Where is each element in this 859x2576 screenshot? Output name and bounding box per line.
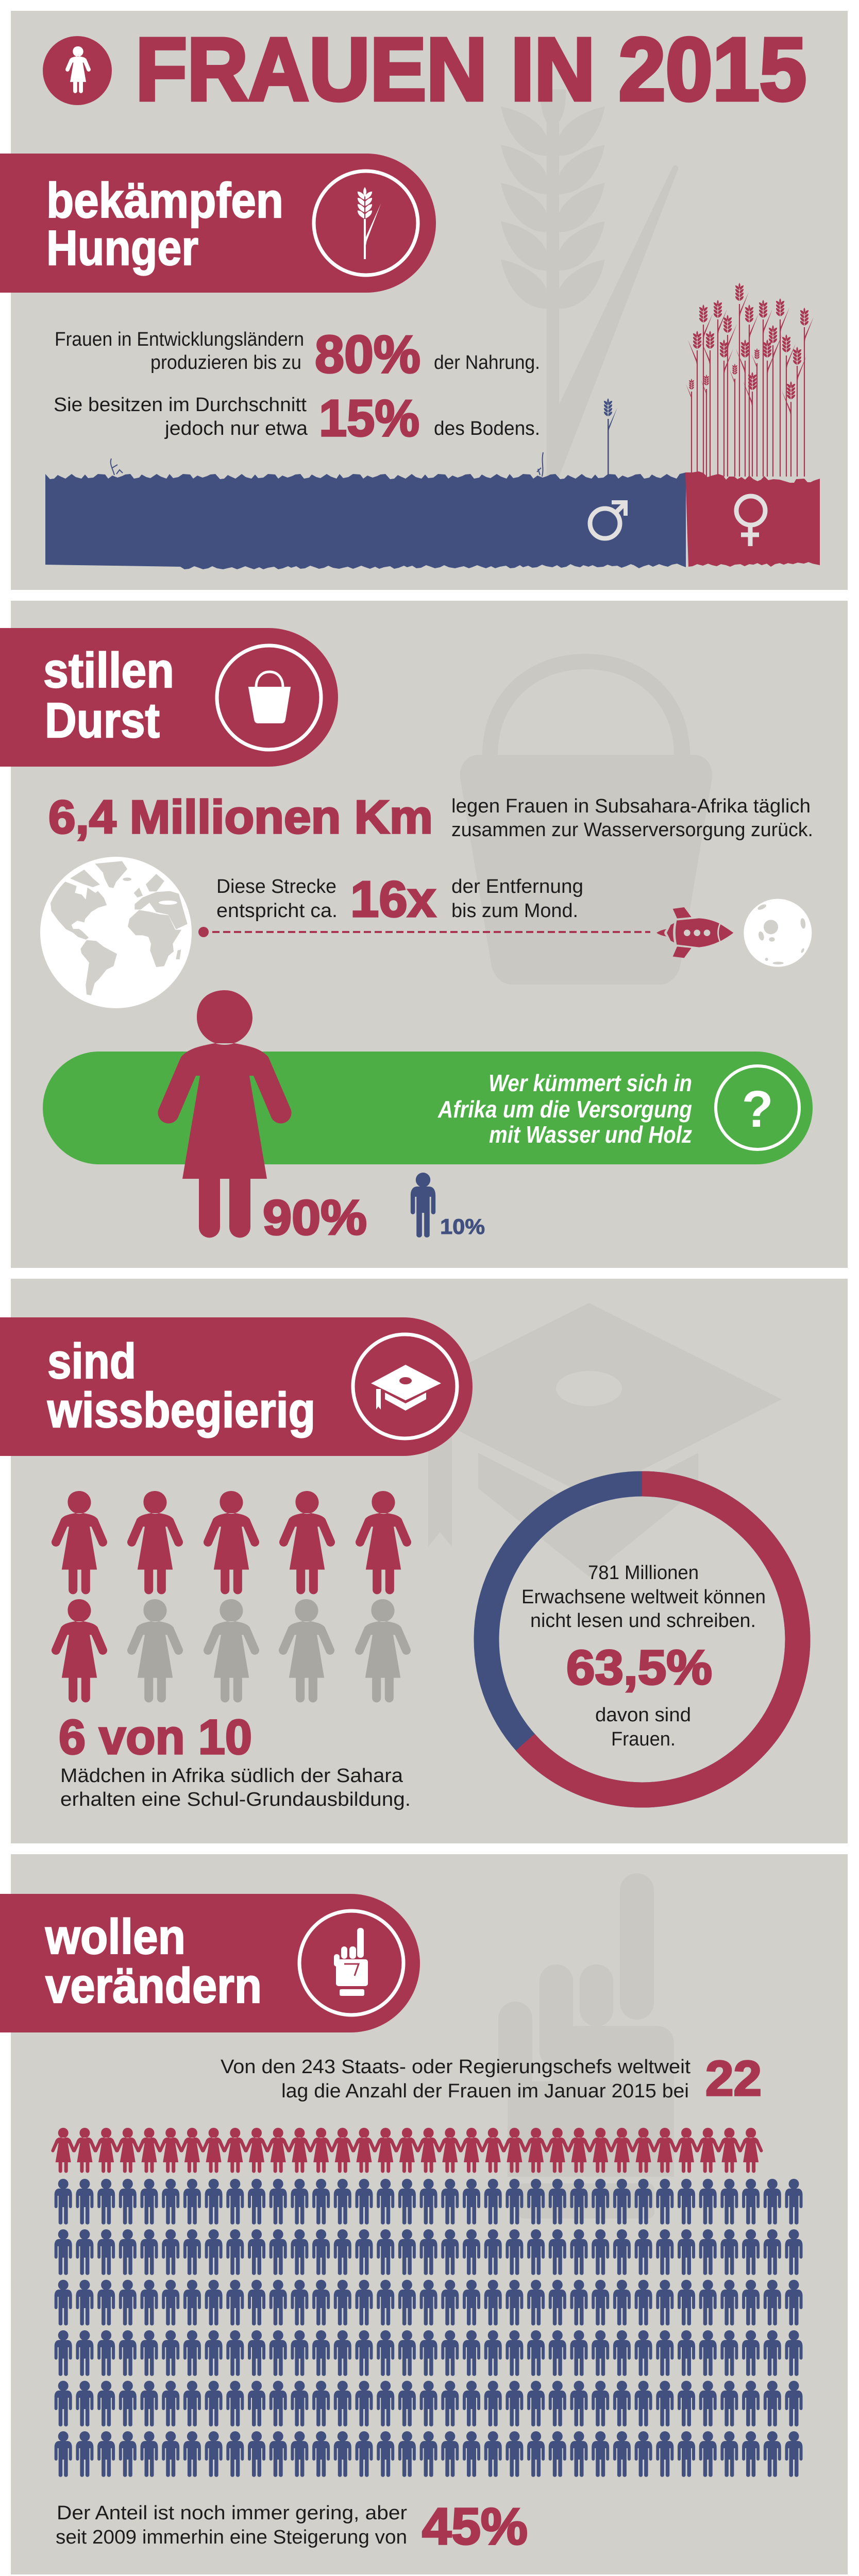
- female soil share: [685, 471, 820, 567]
- heading banner: sind wissbegierig: [0, 1317, 473, 1456]
- red wheat field: [686, 283, 814, 477]
- background wheat watermark: [501, 89, 678, 500]
- text block: Wasserversorgung: legen Frauen in Subsahara-Afrika täglich: [451, 795, 811, 817]
- panel: sind wissbegierig: [0, 1279, 848, 1843]
- icon: wheat: [314, 171, 418, 275]
- callout: Wer kümmert sich: Wer kümmert sich in: [489, 1070, 692, 1096]
- title icon: woman in circle: [43, 36, 112, 105]
- callout: Wer kümmert sich: [43, 1052, 813, 1164]
- text block: 80 percent: 80%: [315, 325, 420, 384]
- figure: woman 90%: [158, 990, 292, 1238]
- donut chart: 63.5 percent: [486, 1484, 798, 1795]
- text block: Wasserversorgung: [451, 795, 813, 841]
- male soil share: [45, 472, 686, 569]
- text block: Wasserversorgung: zusammen zur Wasserversorgung zurück.: [451, 819, 813, 841]
- heading banner: wollen verändern: verändern: [45, 1958, 262, 2013]
- text block: Staatschefs: Von den 243 Staats- oder Regierungschefs weltweit: [221, 2056, 690, 2078]
- text block: Anteil: [56, 2502, 407, 2548]
- background bucket watermark: [460, 654, 712, 985]
- icon: male sign: [590, 500, 628, 538]
- pictogram: men rows: [55, 2179, 803, 2477]
- text block: Mädchen: Mädchen in Afrika südlich der Sahara: [60, 1765, 403, 1787]
- statistic: 6,4 Millionen Km: 6,4 Millionen Km: [48, 791, 433, 843]
- text block: 15 percent: jedoch nur etwa: [164, 418, 308, 439]
- heading banner: wollen verändern: [0, 1894, 420, 2032]
- text block: Anteil: seit 2009 immerhin eine Steigerung von: [56, 2527, 407, 2548]
- icon: question mark: [716, 1066, 799, 1149]
- heading banner: bekämpfen Hunger: Hunger: [46, 221, 198, 276]
- text block: donut centre: 63,5%: [566, 1640, 712, 1695]
- callout: Wer kümmert sich: Afrika um die Versorgung: [437, 1096, 692, 1123]
- text block: 15 percent: Sie besitzen im Durchschnitt: [54, 394, 307, 416]
- icon: globe: [40, 857, 192, 1008]
- text block: Diese Strecke: [216, 871, 583, 927]
- text block: Diese Strecke: entspricht ca.: [216, 900, 338, 922]
- statistic: 45%: 45%: [422, 2498, 528, 2555]
- label: 90%: 90%: [263, 1190, 367, 1245]
- heading banner: stillen Durst: stillen: [43, 643, 174, 698]
- heading banner: bekämpfen Hunger: [0, 154, 436, 293]
- heading banner: wollen verändern: wollen: [45, 1909, 186, 1964]
- panel: stillen Durst: [0, 601, 848, 1268]
- text block: 15 percent: 15%: [319, 389, 419, 447]
- text block: Diese Strecke: bis zum Mond.: [451, 900, 578, 922]
- heading banner: sind wissbegierig: wissbegierig: [47, 1383, 315, 1438]
- text block: Diese Strecke: Diese Strecke: [216, 876, 336, 897]
- pictogram: women row: [51, 2128, 763, 2173]
- text block: donut centre: davon sind: [595, 1704, 691, 1726]
- background graduation cap watermark: [396, 1303, 782, 1577]
- background hand watermark: [498, 1873, 674, 2218]
- panel: bekämpfen Hunger: [0, 11, 848, 590]
- icon: graduation cap: [353, 1334, 457, 1438]
- figure: man 10%: [411, 1173, 435, 1238]
- text block: 15 percent: [54, 389, 540, 447]
- heading banner: stillen Durst: [0, 628, 338, 767]
- twigs: [111, 452, 543, 477]
- pictogram: 6 of 10 girls: [52, 1491, 411, 1702]
- icon: female sign: [736, 496, 765, 546]
- text block: Mädchen: erhalten eine Schul-Grundausbildung.: [60, 1789, 411, 1810]
- text block: donut centre: Frauen.: [611, 1728, 676, 1750]
- dashed flight path: [198, 927, 650, 937]
- text block: 80 percent: [55, 325, 540, 384]
- text block: Diese Strecke: der Entfernung: [451, 876, 583, 897]
- text block: Anteil: Der Anteil ist noch immer gering, aber: [57, 2502, 407, 2524]
- text block: Diese Strecke: 16x: [350, 871, 436, 927]
- text block: donut centre: Erwachsene weltweit können: [521, 1586, 766, 1608]
- callout: Wer kümmert sich: mit Wasser und Holz: [489, 1121, 692, 1148]
- icon: question mark: ?: [742, 1080, 773, 1138]
- text block: 80 percent: der Nahrung.: [434, 352, 540, 374]
- icon: rocket: [656, 907, 733, 958]
- text block: donut centre: 781 Millionen: [588, 1562, 699, 1584]
- text block: 80 percent: Frauen in Entwicklungsländern: [55, 329, 304, 350]
- blue wheat plant: [604, 398, 617, 477]
- text block: Staatschefs: lag die Anzahl der Frauen im Januar 2015 bei: [281, 2080, 689, 2102]
- statistic: 6 von 10: 6 von 10: [59, 1710, 252, 1765]
- heading banner: stillen Durst: Durst: [45, 693, 160, 748]
- text block: 80 percent: produzieren bis zu: [150, 352, 301, 374]
- title: FRAUEN IN 2015: [136, 19, 806, 119]
- icon: raised hand: [299, 1911, 403, 2015]
- text block: 15 percent: des Bodens.: [434, 418, 540, 439]
- icon: bucket: [217, 646, 321, 750]
- text block: Staatschefs: [221, 2056, 690, 2102]
- icon: moon: [744, 899, 812, 967]
- heading banner: sind wissbegierig: sind: [47, 1334, 136, 1389]
- text block: Mädchen: [60, 1765, 411, 1810]
- statistic: 22: 22: [705, 2051, 762, 2106]
- label: 10%: 10%: [440, 1214, 485, 1239]
- text block: donut centre: [521, 1562, 766, 1750]
- heading banner: bekämpfen Hunger: bekämpfen: [46, 173, 283, 228]
- panel: wollen verändern: [0, 1854, 848, 2574]
- text block: donut centre: nicht lesen und schreiben.: [530, 1610, 756, 1632]
